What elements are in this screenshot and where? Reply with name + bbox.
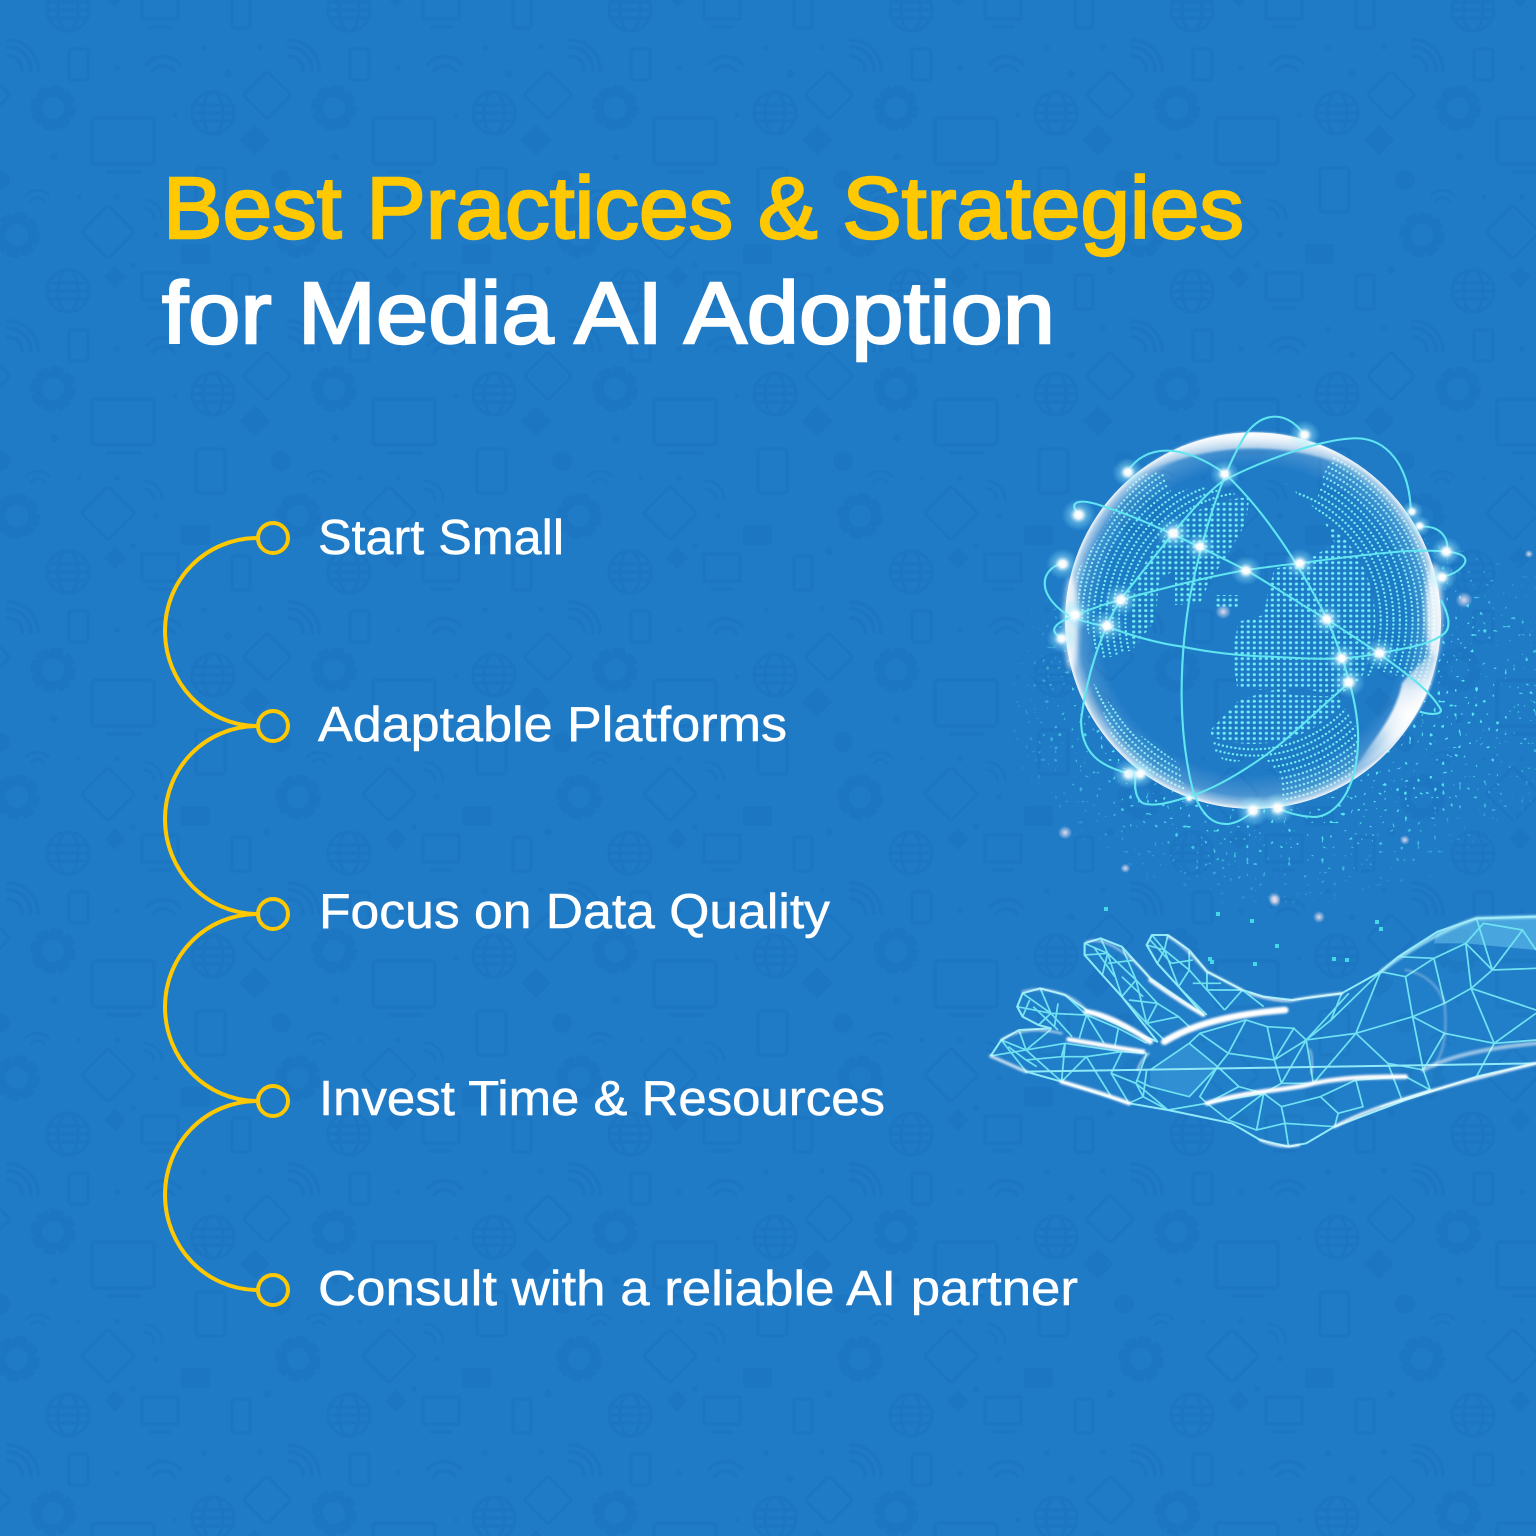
loose particles above hand [1104, 907, 1383, 966]
item 3: Focus on Data Quality [319, 885, 831, 939]
dotted world map [1076, 457, 1435, 801]
title line 1: Best Practices & Strategies [163, 160, 1244, 257]
particle dust around globe [1013, 534, 1536, 904]
orbit lines [1045, 417, 1465, 824]
network light nodes [1046, 420, 1462, 827]
item 1: Start Small [318, 511, 564, 565]
sparkles above hand [1269, 895, 1325, 923]
hand highlights [991, 917, 1536, 1146]
illustration: digital globe [1045, 417, 1533, 904]
glass sphere [1064, 432, 1442, 809]
faint pink sparkles [1058, 550, 1533, 904]
item 2: Adaptable Platforms [318, 698, 787, 752]
hand outline [991, 917, 1536, 1147]
illustration: low-poly wireframe hand [988, 914, 1536, 1149]
timeline list [165, 511, 1078, 1316]
infographic canvas [162, 173, 1536, 1316]
item 5: Consult with a reliable AI partner [318, 1262, 1078, 1316]
title line 2: for Media AI Adoption [162, 265, 1055, 362]
title [162, 160, 1244, 362]
item 4: Invest Time & Resources [319, 1072, 885, 1126]
connector curves [165, 538, 258, 1290]
hand mesh [992, 918, 1536, 1146]
